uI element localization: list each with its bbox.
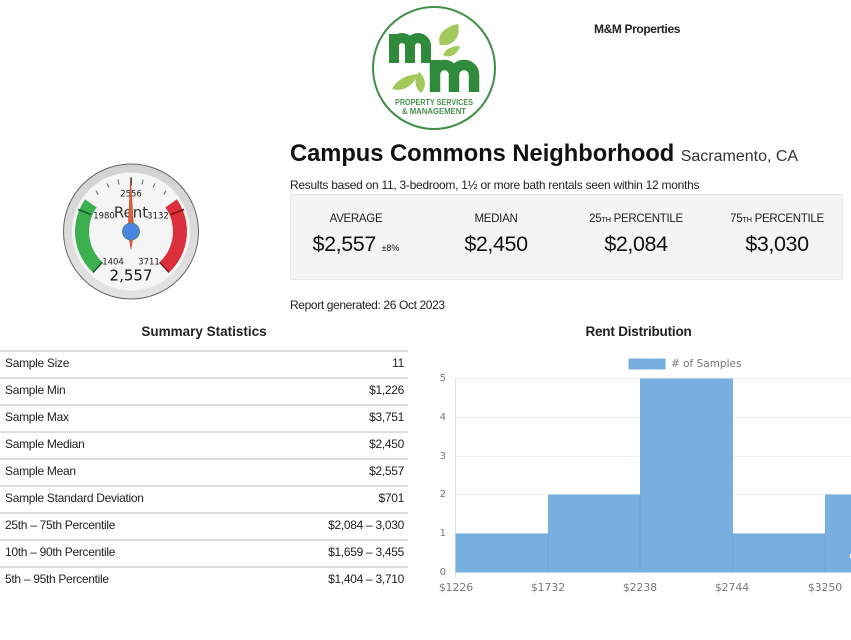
logo: [372, 6, 496, 130]
company name: M&M Properties: [594, 22, 680, 36]
summary table: Sample Median: [5, 437, 84, 451]
summary table: Sample Mean: [5, 464, 76, 478]
summary table: $1,404 – 3,710: [328, 572, 404, 586]
chart x axis labels: $1226: [439, 581, 473, 594]
chart y axis labels: [440, 373, 446, 578]
logo: & MANAGEMENT: [402, 107, 466, 116]
gauge green band: [75, 199, 102, 272]
stat: median: $2,450: [464, 232, 528, 256]
chart bars: [456, 378, 851, 572]
chart y axis labels: 4: [440, 412, 446, 423]
chart y axis labels: 5: [440, 373, 446, 384]
summary table: Sample Size: [5, 356, 69, 370]
stat: 75th percentile: [730, 213, 824, 256]
stat: average: AVERAGE: [330, 213, 382, 225]
summary table: $3,751: [369, 410, 404, 424]
histogram: [439, 358, 851, 594]
gauge tick labels: 1980: [93, 212, 115, 222]
chart y axis labels: 3: [440, 451, 446, 462]
chart y axis labels: 2: [440, 489, 446, 500]
icon: leaves: [392, 24, 460, 93]
gauge tick labels: 3132: [147, 212, 169, 222]
summary table: 5th – 95th Percentile: [5, 572, 109, 586]
summary table: $1,226: [369, 383, 404, 397]
results note: Results based on 11, 3-bedroom, 1½ or more bath rentals seen within 12 months: [290, 178, 699, 192]
page title: Campus Commons Neighborhood Sacramento, CA: [290, 141, 798, 167]
summary table: Sample Max: [5, 410, 69, 424]
panel: key figures: [290, 194, 843, 280]
gauge tick labels: [93, 190, 169, 268]
stat: median: [464, 213, 528, 256]
report date: Report generated: 26 Oct 2023: [290, 298, 445, 312]
gauge ticks: [78, 178, 184, 272]
summary table: 25th – 75th Percentile: [5, 518, 115, 532]
chart data point marker: [849, 552, 851, 560]
gauge needle: [128, 178, 134, 250]
chart x axis labels: $3250: [808, 581, 842, 594]
gauge: [63, 164, 199, 300]
chart heading: Rent Distribution: [585, 324, 692, 339]
stat: 25th percentile: 25TH PERCENTILE: [589, 213, 683, 225]
summary table: $2,084 – 3,030: [328, 518, 404, 532]
stat: average: $2,557 ±8%: [313, 232, 399, 256]
chart grid: [455, 378, 851, 577]
chart y axis labels: 1: [440, 528, 446, 539]
stat: median: MEDIAN: [475, 213, 517, 225]
summary table: $2,557: [369, 464, 404, 478]
chart legend: # of Samples: [671, 358, 741, 370]
gauge tick labels: 1404: [102, 258, 124, 268]
gauge red band: [160, 199, 187, 272]
summary table: [0, 350, 408, 586]
summary table: $1,659 – 3,455: [328, 545, 404, 559]
stat: 75th percentile: 75TH PERCENTILE: [730, 213, 824, 225]
gauge title: Rent: [114, 204, 148, 222]
gauge tick labels: 2556: [120, 190, 142, 200]
gauge tick labels: 3711: [138, 258, 160, 268]
summary table: $2,450: [369, 437, 404, 451]
summary heading: Summary Statistics: [141, 324, 267, 339]
stat: 75th percentile: $3,030: [745, 232, 809, 256]
logo letters mm: [394, 34, 474, 92]
chart y axis labels: 0: [440, 567, 446, 578]
gauge value: 2,557: [110, 266, 152, 284]
stat: average: [312, 213, 400, 256]
chart x axis labels: $2744: [715, 581, 749, 594]
chart x axis labels: $2238: [623, 581, 657, 594]
summary table: $701: [378, 491, 404, 505]
summary table: 11: [392, 356, 404, 370]
summary table: Sample Standard Deviation: [5, 491, 144, 505]
chart x axis labels: [439, 581, 842, 594]
chart x axis labels: $1732: [531, 581, 565, 594]
stat: 25th percentile: [589, 213, 683, 256]
summary table: 10th – 90th Percentile: [5, 545, 115, 559]
chart bar edges: [548, 495, 825, 572]
summary table: Sample Min: [5, 383, 65, 397]
stat: 25th percentile: $2,084: [604, 232, 668, 256]
logo caption: PROPERTY SERVICES: [395, 98, 474, 107]
chart legend: [628, 358, 741, 370]
